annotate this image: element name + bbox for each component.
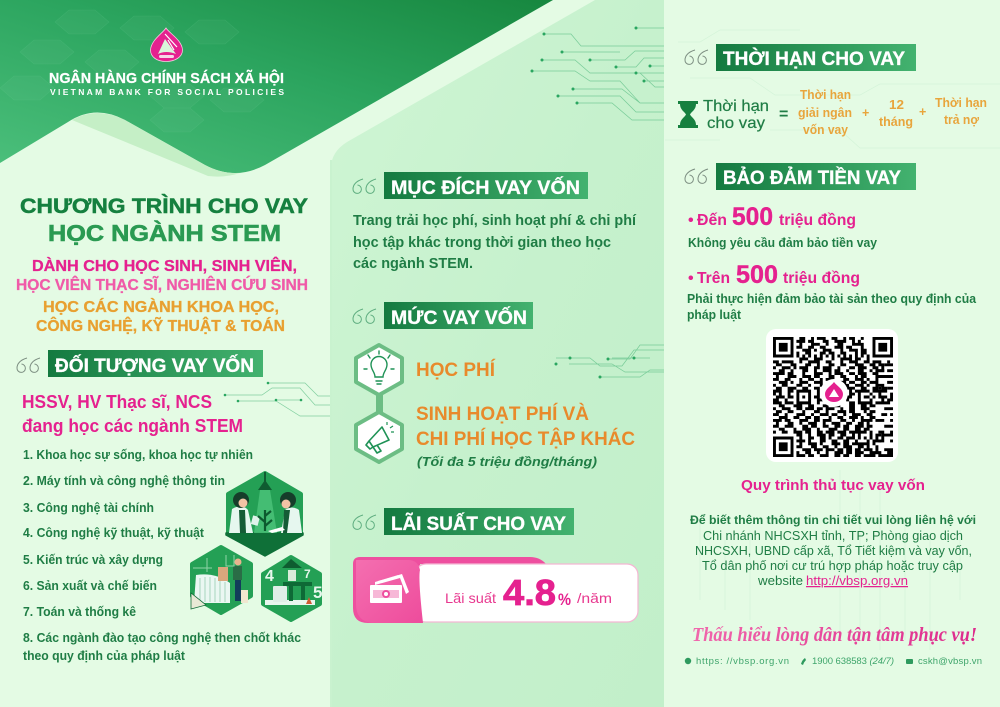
subtitle: audience: HỌC VIÊN THẠC SĨ, NGHIÊN CỨU SINH — [16, 274, 308, 294]
text: contact information: Tổ dân phố nơi cư trú hợp pháp hoặc truy cập — [702, 559, 963, 573]
QR code — [766, 329, 898, 462]
heading: thời hạn cho vay — [685, 44, 916, 71]
header: light wedge — [72, 113, 240, 177]
text: up to 500 million: Đến — [697, 212, 727, 229]
heading: bảo đảm tiền vay: BẢO ĐẢM TIỀN VAY — [723, 167, 901, 189]
formula: loan term: + — [862, 106, 869, 120]
list: STEM fields: 7. Toán và thống kê — [23, 605, 136, 619]
list: STEM fields: 8. Các ngành đào tạo công nghệ then chốt khác — [23, 631, 301, 645]
icon: banknotes — [370, 574, 409, 603]
slogan: Thấu hiểu lòng dân tận tâm phục vụ! — [692, 624, 977, 646]
list: STEM fields: 5. Kiến trúc và xây dựng — [23, 553, 163, 567]
text: rate value: /năm — [577, 590, 612, 606]
heading: mức vay vốn: MỨC VAY VỐN — [391, 307, 527, 329]
subtitle: audience: DÀNH CHO HỌC SINH, SINH VIÊN, — [32, 256, 297, 275]
formula: loan term: Thời hạn — [935, 96, 987, 110]
icon: mail — [906, 659, 913, 664]
decoration: circuit lines, middle — [554, 345, 664, 378]
icon: hourglass — [678, 101, 698, 128]
list: STEM fields: 1. Khoa học sự sống, khoa học tự nhiên — [23, 448, 253, 462]
subtitle: fields: HỌC CÁC NGÀNH KHOA HỌC, — [43, 297, 279, 316]
text: monthly limit: (Tối đa 5 triệu đồng/tháng) — [417, 455, 597, 469]
text: rate value — [445, 572, 612, 613]
text: living costs: SINH HOẠT PHÍ VÀ — [416, 402, 589, 425]
decoration: circuit lines, middle top — [530, 26, 664, 120]
formula: loan term: trả nợ — [944, 113, 979, 127]
decoration: circuit lines, right — [665, 30, 1000, 650]
heading: mức vay vốn — [353, 302, 533, 329]
list: STEM fields: 2. Máy tính và công nghệ thông tin — [23, 474, 225, 488]
illustration: mathematics hexagon: 4 — [265, 568, 274, 585]
header: green banner — [0, 0, 553, 177]
text: contact information: Để biết thêm thông tin chi tiết vui lòng liên hệ với — [690, 513, 976, 527]
panel: middle column — [331, 0, 664, 707]
panel: left column edge strip — [330, 160, 332, 707]
formula: loan term — [703, 88, 987, 137]
illustration: mathematics hexagon: 5 — [313, 583, 322, 602]
formula: loan term: Thời hạn — [800, 88, 851, 102]
text: up to 500 million: Không yêu cầu đảm bảo tiền vay — [688, 236, 877, 250]
text: over 500 million — [687, 261, 977, 322]
text: loan purpose: học tập khác trong thời gian theo học — [353, 235, 611, 251]
text: up to 500 million: • — [688, 212, 694, 229]
text: rate value: Lãi suất — [445, 590, 496, 606]
text: rate value: % — [558, 590, 571, 609]
text: living costs: CHI PHÍ HỌC TẬP KHÁC — [416, 426, 635, 450]
text: over 500 million: pháp luật — [687, 308, 742, 322]
footer: contact row — [685, 656, 982, 667]
formula: loan term: + — [919, 105, 926, 119]
text: over 500 million: triệu đồng — [783, 270, 860, 287]
logo: bank name: NGÂN HÀNG CHÍNH SÁCH XÃ HỘI — [49, 69, 284, 87]
text: contact information: http://vbsp.org.vn — [806, 574, 908, 588]
text: loan purpose — [353, 213, 637, 272]
text: contact information: website — [757, 574, 803, 588]
subtitle: fields — [36, 297, 285, 335]
text: over 500 million: Phải thực hiện đảm bảo tài sản theo quy định của — [687, 292, 977, 306]
subtitle: fields: CÔNG NGHỆ, KỸ THUẬT & TOÁN — [36, 315, 285, 335]
heading: lãi suất cho vay — [353, 508, 574, 535]
logo: bank emblem — [150, 28, 182, 62]
text: over 500 million: Trên — [697, 270, 730, 287]
formula: loan term: Thời hạn — [703, 98, 769, 115]
text: borrower group: đang học các ngành STEM — [22, 416, 243, 436]
formula: loan term: giải ngân — [798, 106, 852, 120]
subtitle: audience — [16, 256, 308, 294]
icon: phone — [801, 658, 806, 665]
formula: loan term: cho vay — [707, 115, 765, 132]
text: up to 500 million: triệu đồng — [779, 212, 856, 229]
formula: loan term: vốn vay — [803, 123, 848, 137]
title: CHƯƠNG TRÌNH CHO VAY — [20, 195, 308, 218]
text: contact information: NHCSXH, UBND cấp xã, Tổ Tiết kiệm và vay vốn, — [695, 544, 972, 558]
footer: contact row: cskh@vbsp.vn — [918, 656, 982, 667]
illustration: mathematics hexagon: 7 — [304, 567, 311, 581]
decoration: circuit lines, left — [224, 382, 330, 416]
text: over 500 million: • — [688, 270, 694, 287]
formula: loan term: tháng — [879, 115, 913, 129]
illustration: scientists hexagon — [226, 472, 303, 556]
heading: lãi suất cho vay: LÃI SUẤT CHO VAY — [391, 513, 566, 535]
QR logo — [820, 379, 848, 407]
text: contact information — [690, 513, 976, 588]
heading: thời hạn cho vay: THỜI HẠN CHO VAY — [723, 48, 905, 70]
logo: english name: VIETNAM BANK FOR SOCIAL POLICIES — [50, 87, 284, 97]
icon: light bulb — [356, 345, 402, 395]
footer: contact row: 1900 638583 (24/7) — [812, 656, 894, 667]
connector between icons — [376, 394, 383, 413]
icon: megaphone — [356, 412, 402, 462]
text: rate value: 4.8 — [503, 572, 556, 613]
formula: loan term: = — [779, 106, 788, 123]
title: HỌC NGÀNH STEM — [48, 219, 281, 246]
text: loan purpose: Trang trải học phí, sinh hoạt phí & chi phí — [353, 213, 637, 229]
text: loan purpose: các ngành STEM. — [353, 256, 473, 272]
icon: globe — [685, 658, 691, 664]
heading: đối tượng vay vốn: ĐỐI TƯỢNG VAY VỐN — [55, 355, 254, 377]
list: STEM fields: 6. Sản xuất và chế biến — [23, 579, 157, 593]
text: borrower group: HSSV, HV Thạc sĩ, NCS — [22, 392, 212, 412]
list: STEM fields: 4. Công nghệ kỹ thuật, kỹ thuật — [23, 526, 205, 540]
heading: đối tượng vay vốn — [17, 350, 263, 377]
text: living costs — [416, 402, 635, 450]
heading: mục đích vay vốn: MỤC ĐÍCH VAY VỐN — [391, 177, 580, 199]
text: over 500 million: 500 — [736, 261, 778, 289]
footer: contact row: https: //vbsp.org.vn — [696, 656, 789, 667]
text: up to 500 million — [688, 203, 877, 250]
heading: mục đích vay vốn — [353, 172, 588, 199]
link: loan procedure: Quy trình thủ tục vay vốn — [741, 478, 925, 494]
text: học phí: HỌC PHÍ — [416, 359, 496, 381]
illustration: architecture hexagon — [191, 547, 251, 613]
card: interest rate — [353, 557, 638, 623]
formula: loan term: 12 — [889, 98, 904, 112]
list: STEM fields: 3. Công nghệ tài chính — [23, 501, 154, 515]
title — [20, 195, 308, 246]
text: up to 500 million: 500 — [732, 203, 773, 231]
list: STEM fields: theo quy định của pháp luật — [23, 649, 186, 663]
illustration: mathematics hexagon — [263, 557, 322, 620]
list: STEM fields — [23, 448, 301, 663]
text: borrower group — [22, 392, 243, 436]
text: contact information: Chi nhánh NHCSXH tỉnh, TP; Phòng giao dịch — [703, 529, 963, 543]
heading: bảo đảm tiền vay — [685, 163, 916, 190]
